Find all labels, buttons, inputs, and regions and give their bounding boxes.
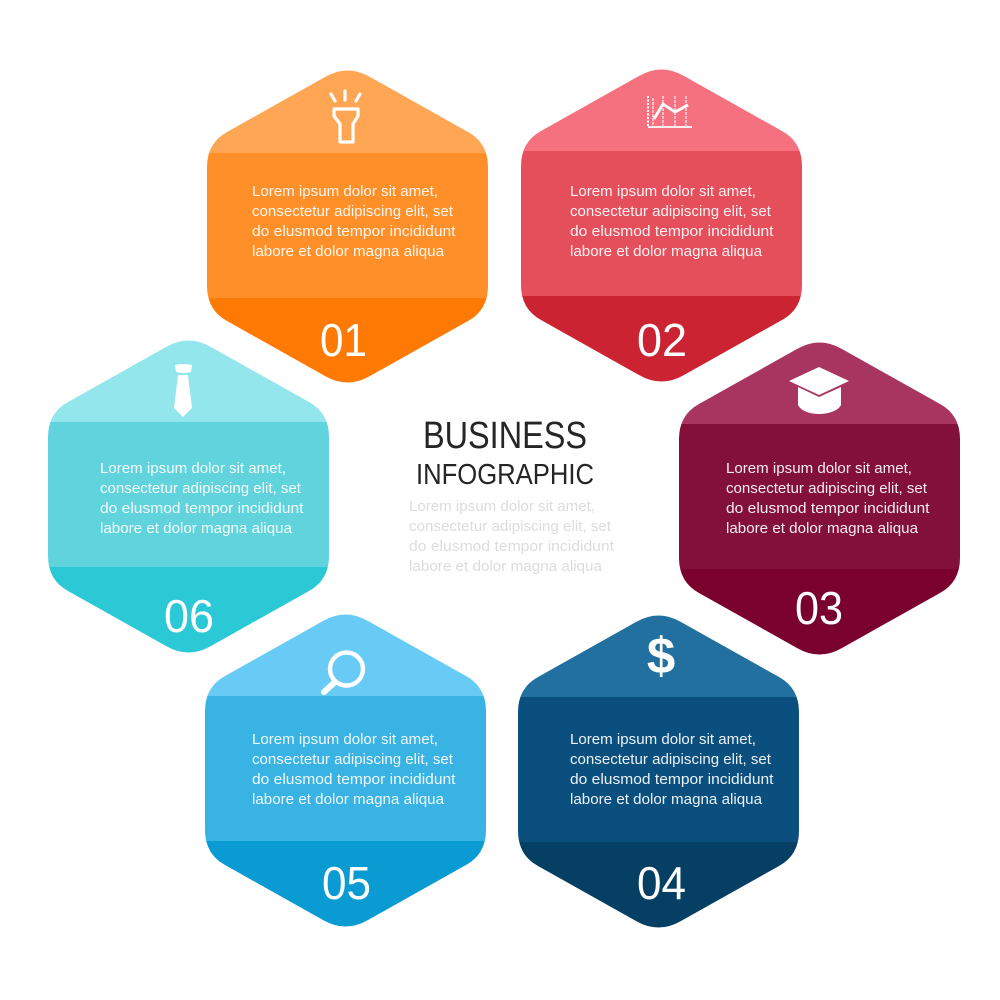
text block 03: consectetur adipiscing elit, set — [726, 481, 927, 497]
text block 06: Lorem ipsum dolor sit amet, — [100, 461, 286, 477]
text block 05 — [252, 732, 456, 808]
number 03: 03 — [795, 582, 843, 634]
icon: magnifying glass — [324, 652, 363, 692]
text block 03: do elusmod tempor incididunt — [726, 501, 930, 517]
panel: hexagon 01 — [207, 70, 488, 383]
text block 04: labore et dolor magna aliqua — [570, 792, 763, 808]
icon: necktie — [174, 364, 192, 417]
text block 01: labore et dolor magna aliqua — [252, 244, 445, 260]
panel: hexagon 03 — [679, 342, 960, 655]
number 06: 06 — [164, 590, 214, 642]
text block 02: labore et dolor magna aliqua — [570, 244, 763, 260]
text block 04: do elusmod tempor incididunt — [570, 772, 774, 788]
text block 06: do elusmod tempor incididunt — [100, 501, 304, 517]
center description text: Lorem ipsum dolor sit amet, — [409, 499, 595, 515]
panel: hexagon 04 — [518, 615, 799, 928]
title: BUSINESS — [423, 415, 587, 457]
icon: graduation cap — [789, 367, 849, 414]
number 01: 01 — [320, 314, 367, 366]
text block 04: Lorem ipsum dolor sit amet, — [570, 732, 756, 748]
text block 01: consectetur adipiscing elit, set — [252, 204, 453, 220]
panel: hexagon 02 — [521, 69, 802, 382]
number 05: 05 — [322, 857, 371, 909]
text block 01: Lorem ipsum dolor sit amet, — [252, 184, 438, 200]
text block 02: consectetur adipiscing elit, set — [570, 204, 771, 220]
panel: hexagon 05 — [205, 614, 486, 927]
panel: hexagon 06 — [48, 340, 329, 653]
text block 03: Lorem ipsum dolor sit amet, — [726, 461, 912, 477]
text block 05: labore et dolor magna aliqua — [252, 792, 445, 808]
text block 06: consectetur adipiscing elit, set — [100, 481, 301, 497]
text block 03: labore et dolor magna aliqua — [726, 521, 919, 537]
text block 01 — [252, 184, 456, 260]
center description text: do elusmod tempor incididunt — [409, 539, 614, 555]
text block 01: do elusmod tempor incididunt — [252, 224, 456, 240]
icon: line chart — [648, 96, 692, 127]
icon: dollar sign: $ — [647, 627, 675, 684]
text block 06: labore et dolor magna aliqua — [100, 521, 293, 537]
text block 03 — [726, 461, 930, 537]
number 04: 04 — [637, 857, 686, 909]
title — [416, 415, 594, 491]
title: INFOGRAPHIC — [416, 459, 594, 491]
text block 04 — [570, 732, 774, 808]
text block 02 — [570, 184, 774, 260]
center description text: labore et dolor magna aliqua — [409, 559, 603, 575]
text block 05: consectetur adipiscing elit, set — [252, 752, 453, 768]
text block 06 — [100, 461, 304, 537]
text block 05: do elusmod tempor incididunt — [252, 772, 456, 788]
text block 04: consectetur adipiscing elit, set — [570, 752, 771, 768]
text block 05: Lorem ipsum dolor sit amet, — [252, 732, 438, 748]
number 02: 02 — [637, 314, 687, 366]
center description text — [409, 499, 614, 575]
text block 02: do elusmod tempor incididunt — [570, 224, 774, 240]
icon: flashlight — [331, 91, 360, 142]
text block 02: Lorem ipsum dolor sit amet, — [570, 184, 756, 200]
center description text: consectetur adipiscing elit, set — [409, 519, 611, 535]
